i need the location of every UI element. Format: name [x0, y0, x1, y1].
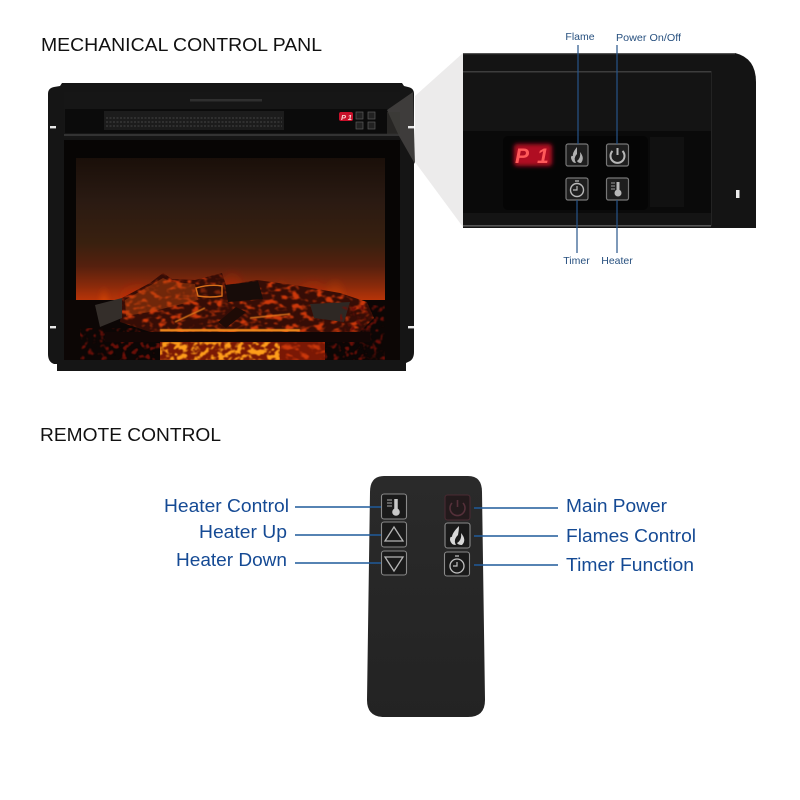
small slot	[736, 190, 740, 198]
flames	[99, 262, 345, 322]
fireplace frame	[48, 83, 414, 371]
remote control	[367, 476, 485, 717]
panel: control panel close-up	[463, 53, 756, 228]
mini buttons	[356, 112, 375, 129]
remote body	[367, 476, 485, 717]
button: main power	[445, 495, 470, 520]
label: Heater Control: Heater Control	[164, 495, 289, 516]
top control bar	[64, 92, 400, 138]
heater vent grille	[104, 111, 284, 130]
ember glow above grate	[160, 329, 300, 332]
lower embers	[110, 342, 370, 360]
left and right dark ember mounds	[80, 328, 155, 360]
button: timer function	[444, 552, 470, 576]
callout: Timer: Timer	[563, 255, 590, 267]
top control bar: P 1	[341, 113, 352, 122]
label: Flames Control: Flames Control	[566, 525, 696, 546]
callout: Power On/Off: Power On/Off	[616, 32, 681, 44]
button: power	[606, 144, 628, 166]
log ends and dark sections	[95, 298, 122, 327]
logs	[95, 273, 374, 332]
button: timer	[566, 178, 588, 200]
button: heater up	[382, 522, 406, 547]
label: Heater Down: Heater Down	[176, 549, 287, 570]
fireplace illustration	[48, 83, 415, 371]
callout: Heater: Heater	[601, 255, 633, 267]
zoom wedge connecting fireplace to detail	[415, 53, 463, 227]
mounting slots	[50, 126, 414, 328]
LED display P1: P1	[515, 145, 557, 168]
lower ember bed dark	[64, 300, 400, 360]
label: Timer Function: Timer Function	[566, 554, 694, 575]
button: heater	[606, 178, 628, 200]
firebox	[64, 140, 400, 360]
title: remote control: REMOTE CONTROL	[40, 424, 221, 445]
callout: Flame	[565, 31, 595, 144]
callout: Flame: Flame	[565, 31, 595, 43]
grey highlight corner of frame	[387, 92, 415, 164]
button: heater control	[382, 494, 406, 519]
label: Main Power: Main Power	[566, 495, 667, 516]
grate bar	[105, 332, 370, 342]
label: Heater Up: Heater Up	[199, 521, 287, 542]
button: flames control	[445, 523, 470, 548]
button: heater down	[382, 551, 406, 575]
title: mechanical control panel: MECHANICAL CONTROL PANL	[41, 34, 322, 55]
callout: Timer	[563, 200, 590, 267]
callout: Heater	[601, 200, 633, 267]
callout: Power On/Off	[616, 32, 681, 144]
button: flame	[566, 144, 588, 166]
mini LED display	[339, 112, 353, 121]
